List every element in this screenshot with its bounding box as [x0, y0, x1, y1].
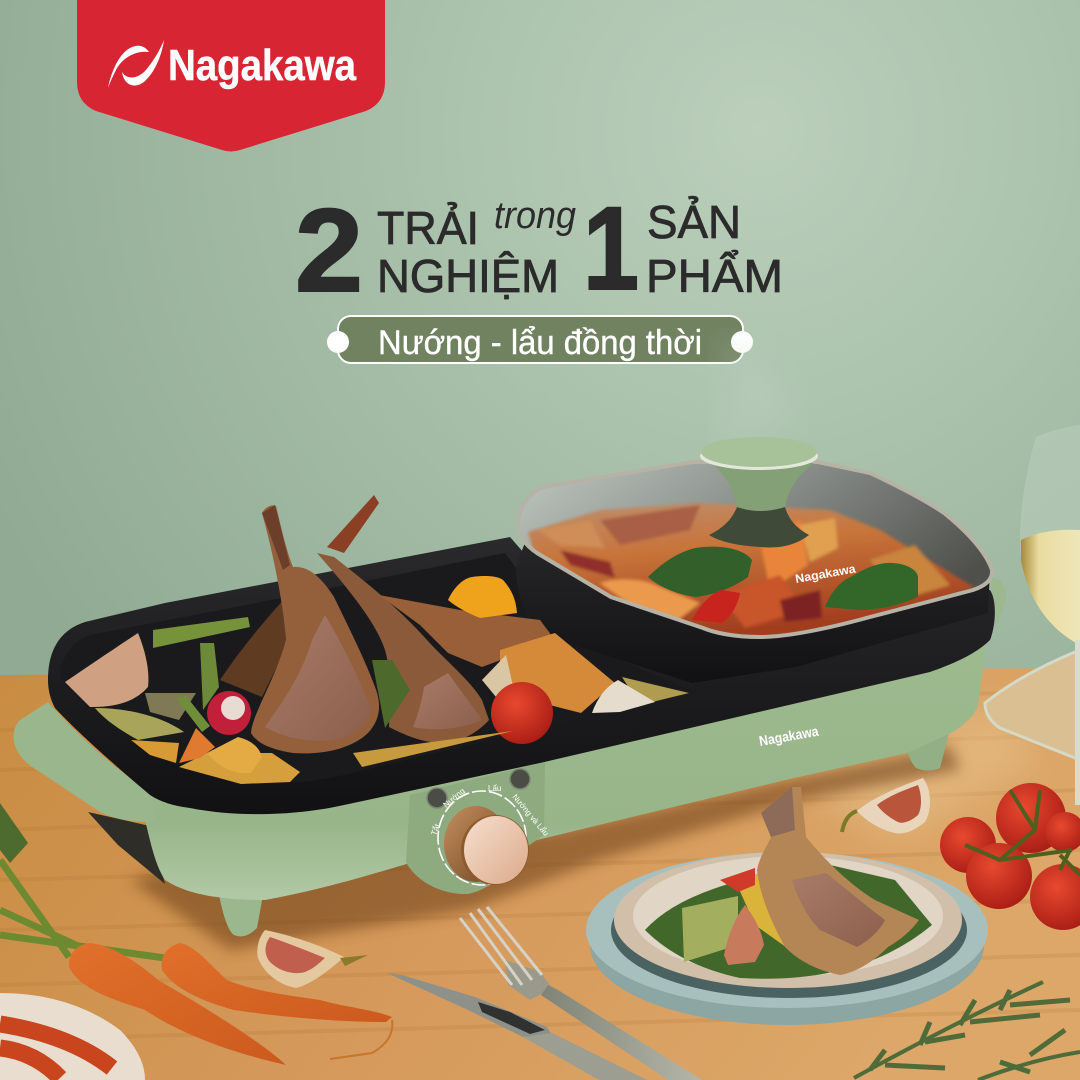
- logo badge: [77, 0, 385, 152]
- brand name: Nagakawa: [168, 41, 356, 90]
- body brand: Nagakawa: [758, 723, 820, 749]
- garlic left: [482, 655, 515, 697]
- steam: [717, 340, 800, 450]
- herbs: [372, 660, 410, 728]
- fig half on table: [842, 778, 930, 833]
- lamb chop on plate: [757, 787, 919, 975]
- icon: logo swirl: [108, 40, 164, 88]
- garlic: [592, 680, 655, 713]
- lid brand: Nagakawa: [794, 562, 857, 586]
- fig by carrots: [257, 930, 368, 988]
- left handle: [14, 702, 155, 822]
- corn strip: [622, 677, 689, 705]
- under handle vent: [88, 812, 165, 884]
- asparagus: [153, 617, 250, 648]
- fish: [500, 633, 615, 713]
- broccoli left: [648, 547, 752, 597]
- yellow base: [179, 753, 300, 784]
- soup: [528, 503, 975, 640]
- fig: [65, 633, 148, 707]
- dial buttons: [427, 769, 530, 808]
- dial knob: [444, 806, 529, 885]
- griddle surface: [60, 553, 695, 784]
- red pepper: [692, 590, 740, 623]
- orange pepper: [448, 576, 517, 618]
- headline: trong: [494, 195, 576, 237]
- dial labels: Nướng: [442, 786, 467, 810]
- knob housing: [406, 762, 545, 894]
- foot: left: [219, 895, 263, 936]
- pot base: [516, 520, 990, 683]
- knife: [387, 973, 647, 1080]
- headline: SẢN: [647, 196, 741, 248]
- dial ring: [438, 791, 526, 885]
- tomato: [491, 682, 553, 744]
- appliance shadow: [130, 745, 960, 950]
- herbs: [645, 865, 932, 979]
- grill food: [65, 495, 689, 784]
- dial labels: Tắt: [429, 822, 442, 837]
- courgette: [95, 708, 184, 740]
- dial labels: [429, 784, 550, 838]
- dial labels: Lẩu: [488, 784, 501, 793]
- lid rim: [518, 462, 992, 637]
- subtitle pill: Nướng - lẩu đồng thời: [378, 324, 702, 362]
- headline: [295, 183, 783, 317]
- headline: 2: [295, 185, 363, 317]
- dial labels: Nướng và Lẩu: [510, 793, 550, 838]
- carrots: [0, 803, 392, 1065]
- cucumber: [682, 896, 738, 962]
- gray courgette: [145, 693, 196, 720]
- foot: right: [905, 725, 951, 770]
- orange slice: [131, 740, 179, 763]
- headline: NGHIỆM: [377, 250, 559, 302]
- pot lid interior: [520, 464, 990, 635]
- fig on plate: [724, 905, 764, 965]
- headline: 1: [583, 183, 639, 315]
- rosemary: [854, 982, 1080, 1080]
- green body: [145, 647, 986, 900]
- yellow veg: [720, 868, 790, 950]
- background wall: [0, 0, 1080, 690]
- shrimp plate: [0, 993, 145, 1080]
- subtitle pill: [327, 316, 753, 363]
- back chop: [220, 597, 290, 697]
- broccoli right: [825, 563, 918, 610]
- wine glass: [985, 425, 1080, 805]
- salad plate: [586, 787, 988, 1025]
- potato: [207, 737, 262, 773]
- lid handle: [700, 437, 818, 548]
- fork: [460, 907, 702, 1080]
- lamb chop right: [317, 495, 489, 743]
- lamb chop left: [251, 505, 379, 753]
- tomatoes: [940, 783, 1080, 930]
- carrot piece: [179, 728, 215, 763]
- yellow slab: [353, 731, 513, 767]
- green corn: [200, 643, 219, 710]
- headline: PHẨM: [646, 250, 783, 302]
- black rim: [48, 537, 995, 814]
- radish: [207, 691, 251, 735]
- beef: [379, 595, 555, 667]
- wooden table: [0, 668, 1080, 1080]
- right handle: [990, 577, 1006, 628]
- green stalk: [176, 696, 210, 732]
- headline: TRẢI: [377, 202, 479, 254]
- grill appliance: [14, 437, 1006, 936]
